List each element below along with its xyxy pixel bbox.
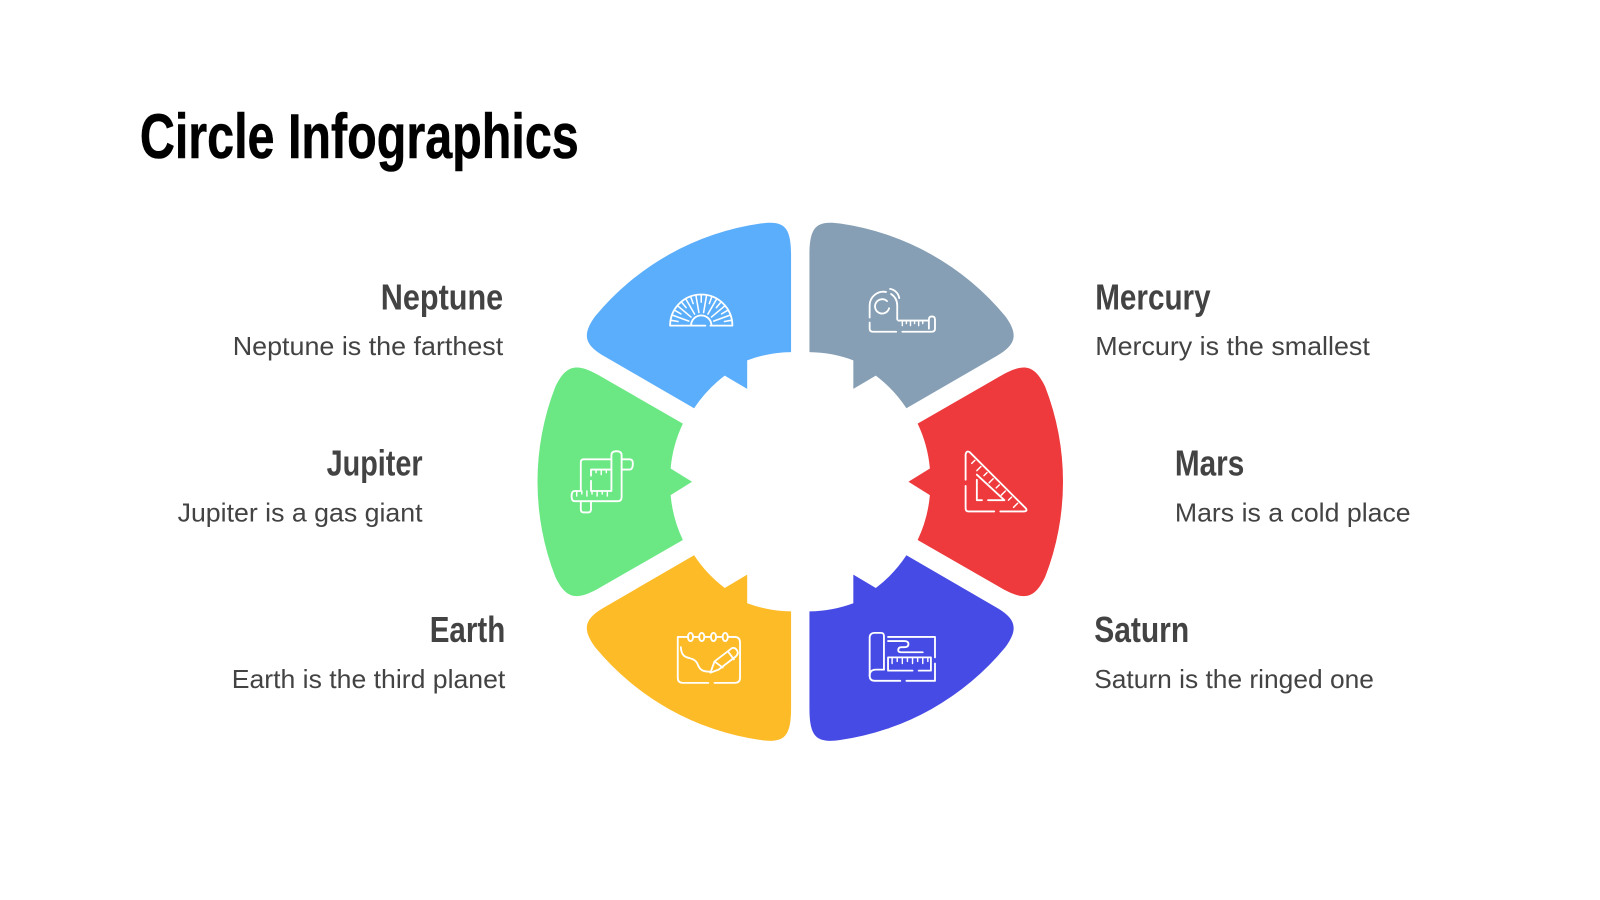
label: Earth: Earth is the third planet — [232, 666, 505, 694]
label: Mercury — [1095, 277, 1370, 361]
label: Saturn: Saturn — [1094, 610, 1189, 650]
label: Saturn: Saturn is the ringed one — [1094, 666, 1374, 694]
label: Earth: Earth — [430, 610, 505, 650]
segment: Saturn — [809, 555, 1014, 741]
title: Circle Infographics — [140, 102, 579, 172]
label: Earth — [232, 610, 505, 694]
label: Neptune: Neptune — [381, 277, 503, 317]
label: Mars: Mars — [1175, 444, 1244, 484]
label: Neptune — [233, 277, 503, 361]
label: Mercury: Mercury is the smallest — [1095, 333, 1370, 361]
label: Jupiter: Jupiter is a gas giant — [178, 500, 423, 528]
icon: tape measure — [870, 289, 935, 332]
segment: Neptune — [587, 223, 791, 408]
segment: Earth — [587, 555, 791, 741]
label: Mercury: Mercury — [1095, 277, 1211, 317]
label: Jupiter — [178, 444, 423, 528]
label: Mars: Mars is a cold place — [1175, 500, 1411, 528]
icon: protractor — [670, 295, 732, 326]
label: Mars — [1175, 444, 1411, 528]
icon: notepad — [678, 633, 740, 683]
icon: ruler frame — [572, 451, 633, 512]
segment: Mercury — [809, 223, 1014, 408]
icon: set square — [966, 452, 1027, 511]
label: Neptune: Neptune is the farthest — [233, 333, 503, 361]
label: Jupiter: Jupiter — [327, 444, 423, 484]
segment: Jupiter — [538, 367, 692, 596]
icon: blueprint — [870, 633, 935, 681]
label: Saturn — [1094, 610, 1374, 694]
segment: Mars — [908, 367, 1063, 596]
